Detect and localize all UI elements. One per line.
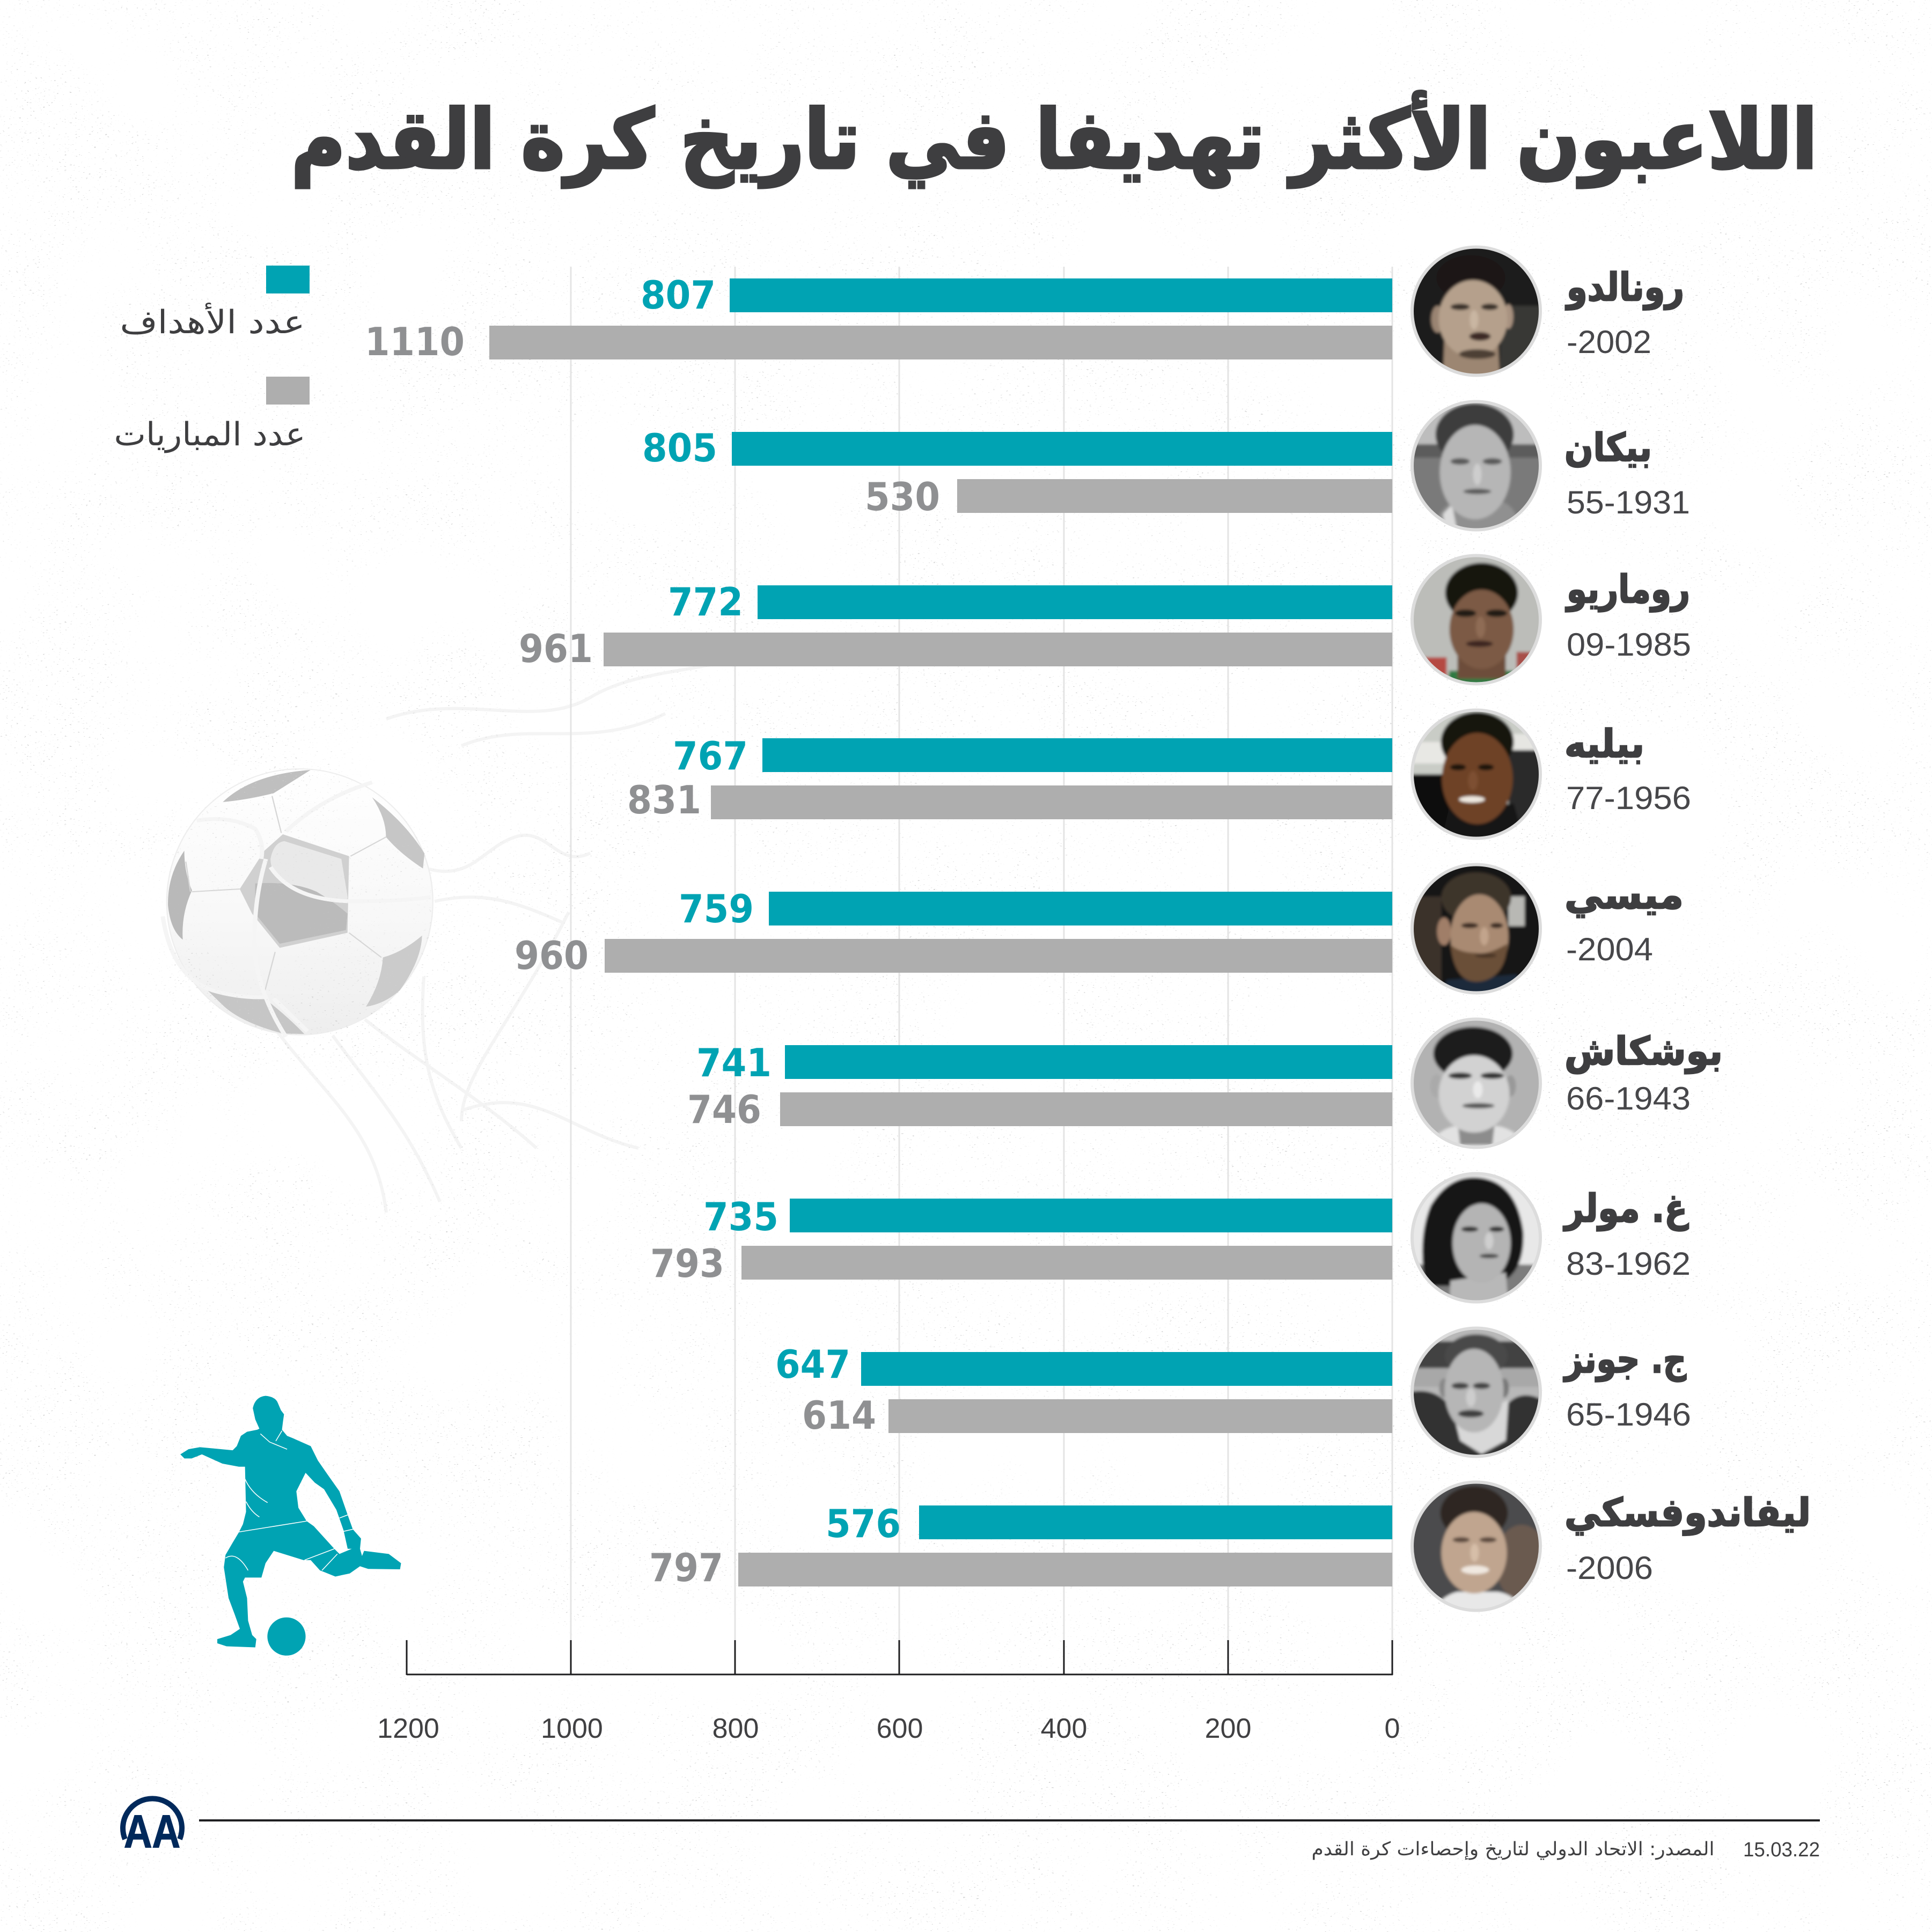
years: Bican: 55-1931 xyxy=(1567,484,1690,520)
row: Puskas bars: 746 xyxy=(687,1087,761,1132)
row: Messi bars xyxy=(515,886,1392,978)
axis labels: 600 xyxy=(877,1713,923,1744)
years: Jones: 65-1946 xyxy=(1566,1397,1691,1433)
axis labels: 400 xyxy=(1041,1713,1087,1744)
icon: football in net xyxy=(163,769,433,1037)
years: Romario: 09-1985 xyxy=(1567,627,1691,663)
legend label: goals: عدد الأهداف xyxy=(120,303,305,341)
name: Messi: ميسي xyxy=(1564,872,1684,918)
bar chart xyxy=(365,273,1392,1590)
name: Bican: بيكان xyxy=(1564,425,1652,470)
row: Bican bars: 805 xyxy=(642,425,717,471)
row: Messi bars: 960 xyxy=(515,933,589,978)
axis labels: 200 xyxy=(1205,1713,1251,1744)
name: Ronaldo: رونالدو xyxy=(1565,265,1684,310)
portrait: Lewandowski xyxy=(1409,1479,1548,1613)
title: اللاعبون الأكثر تهديفا في تاريخ كرة القدم xyxy=(291,91,1818,188)
row: Romario bars: 961 xyxy=(519,626,593,671)
portrait: Pele xyxy=(1409,707,1546,841)
name: Puskas: بوشكاش xyxy=(1564,1029,1723,1074)
row: Muller bars: 793 xyxy=(650,1241,724,1286)
years: Lewandowski: -2006 xyxy=(1566,1550,1653,1586)
row: Bican bars xyxy=(642,425,1392,519)
date: 15.03.22 xyxy=(1743,1839,1820,1861)
years: Pele: 77-1956 xyxy=(1566,780,1691,816)
years: Puskas: 66-1943 xyxy=(1566,1081,1691,1116)
row: Puskas bars: 741 xyxy=(696,1040,772,1085)
portrait: Romario xyxy=(1409,553,1548,687)
name: Muller: غ. مولر xyxy=(1563,1186,1688,1231)
name: Romario: روماريو xyxy=(1565,567,1690,612)
name: Jones: ج. جونز xyxy=(1563,1336,1686,1382)
portrait: Bican xyxy=(1409,399,1543,533)
name: Pele: بيليه xyxy=(1564,721,1644,766)
net lines xyxy=(268,638,805,1213)
axis labels: 1000 xyxy=(541,1713,603,1744)
row: Ronaldo bars: 1110 xyxy=(365,319,465,364)
portrait: Muller xyxy=(1409,1171,1543,1305)
portrait: Ronaldo xyxy=(1409,244,1546,378)
legend label: matches: عدد المباريات xyxy=(114,416,306,453)
icon: football player silhouette xyxy=(180,1396,401,1656)
row: Pele bars xyxy=(627,733,1392,822)
axis labels xyxy=(377,1713,1400,1744)
row: Romario bars xyxy=(519,579,1392,671)
row: Muller bars: 735 xyxy=(703,1194,778,1239)
row: Lewandowski bars: 576 xyxy=(826,1501,901,1546)
row: Ronaldo bars: 807 xyxy=(641,273,716,318)
years: Messi: -2004 xyxy=(1566,931,1653,967)
row: Bican bars: 530 xyxy=(865,474,940,519)
row: Pele bars: 767 xyxy=(673,733,748,778)
logo: AA: AA xyxy=(124,1806,180,1857)
axis labels: 800 xyxy=(712,1713,759,1744)
axis labels: 0 xyxy=(1385,1713,1400,1744)
years: Muller: 83-1962 xyxy=(1566,1246,1691,1282)
chart grid and axis xyxy=(377,267,1400,1744)
portrait: Puskas xyxy=(1409,1016,1543,1150)
footer rule xyxy=(199,1819,1820,1821)
row: Ronaldo bars xyxy=(365,273,1392,364)
source text: المصدر: الاتحاد الدولي لتاريخ وإحصاءات كرة القدم xyxy=(1311,1839,1715,1860)
row: Jones bars: 647 xyxy=(775,1342,850,1387)
portrait: Jones xyxy=(1409,1325,1543,1459)
row: Messi bars: 759 xyxy=(679,886,754,931)
row: Romario bars: 772 xyxy=(668,579,743,625)
axis labels: 1200 xyxy=(377,1713,439,1744)
row: Jones bars xyxy=(775,1342,1392,1438)
row: Lewandowski bars xyxy=(649,1501,1392,1590)
legend xyxy=(114,266,310,453)
years: Ronaldo: -2002 xyxy=(1567,324,1651,360)
portrait: Messi xyxy=(1409,862,1543,996)
row: Pele bars: 831 xyxy=(627,777,701,822)
row: Jones bars: 614 xyxy=(802,1393,876,1438)
legend swatch: goals xyxy=(266,266,310,293)
row: Puskas bars xyxy=(687,1040,1392,1132)
row: Lewandowski bars: 797 xyxy=(649,1545,723,1590)
legend swatch: matches xyxy=(266,377,310,405)
row: Muller bars xyxy=(650,1194,1392,1286)
name: Lewandowski: ليفاندوفسكي xyxy=(1564,1490,1811,1536)
